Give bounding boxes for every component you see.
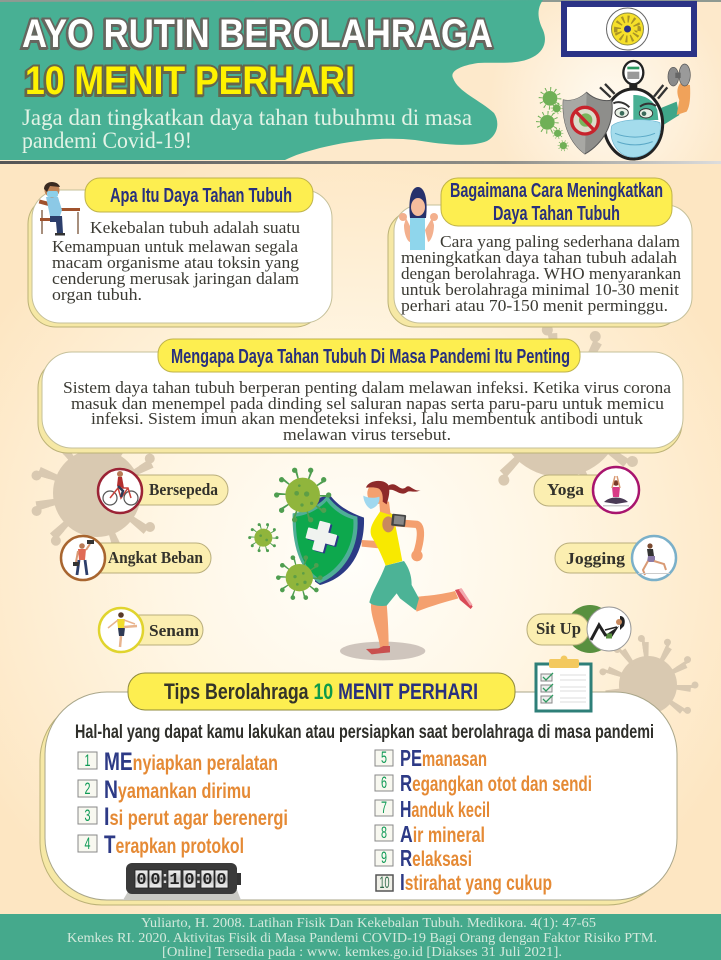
body text: meningkatkan daya tahan tubuh adalah: [401, 248, 678, 267]
icon: cyclist: [98, 469, 142, 513]
background virus: bottom right: [601, 638, 695, 732]
grey shield: [563, 92, 612, 154]
ground shadow: [340, 642, 425, 660]
footer references: Kemkes RI. 2020. Aktivitas Fisik di Masa Pandemi COVID-19 Bagi Orang dengan Faktor Risiko PTM.: [67, 931, 657, 946]
icon: digital timer: :: [193, 870, 204, 889]
list item 5: PEmanasan: [400, 745, 487, 771]
body text: Sistem daya tahan tubuh berperan penting dalam melawan infeksi. Ketika virus corona: [63, 378, 672, 397]
heading pill: [128, 673, 515, 710]
background virus: centre right: [474, 329, 646, 501]
icon: digital timer: 0: [136, 871, 147, 890]
list item 2: [78, 776, 251, 804]
icon: weight lifter: [61, 536, 105, 580]
list item 10: 10: [380, 873, 390, 892]
icon: clipboard: [536, 656, 591, 711]
heading text: Tips Berolahraga 10 MENIT PERHARI: [164, 679, 478, 704]
list item 9: [375, 845, 472, 871]
icon: digital timer: [123, 863, 241, 900]
list item 8: 8: [381, 823, 387, 842]
activity: angkat beban: [61, 536, 211, 580]
footer references: Yuliarto, H. 2008. Latihan Fisik Dan Kekebalan Tubuh. Medikora. 4(1): 47-65: [141, 916, 596, 931]
header divider bar: [0, 161, 721, 164]
icon: stretching woman: [99, 608, 143, 652]
runner: [362, 481, 473, 654]
body text: melawan virus tersebut.: [283, 425, 451, 444]
icon: yoga pose: [593, 467, 639, 513]
central illustration: runner with shield and viruses: [250, 469, 473, 660]
virus small: [250, 524, 277, 551]
activity: yoga: [534, 467, 639, 513]
icon: woman explaining: [399, 187, 438, 250]
body text: macam organisme atau toksin yang: [52, 253, 299, 272]
subtitle: [22, 105, 472, 153]
university logo box: [564, 4, 694, 54]
virus large: [277, 469, 329, 521]
heading pill: [441, 178, 672, 226]
list item 5: 5: [381, 748, 387, 767]
list item 6: Regangkan otot dan sendi: [400, 770, 592, 796]
list item 3: 3: [84, 806, 90, 825]
activity: bersepeda: Bersepeda: [149, 480, 218, 499]
footer references: [Online] Tersedia pada : www. kemkes.go.id [Diakses 31 Juli 2021].: [162, 945, 562, 960]
activity: senam: [99, 608, 203, 652]
shield: [293, 495, 364, 585]
activity: senam: Senam: [149, 621, 199, 640]
body text: Kemampuan untuk melawan segala: [52, 237, 299, 256]
stopwatch top: [623, 61, 643, 84]
panel: tips berolahraga: [40, 656, 677, 905]
icon: digital timer: :: [160, 870, 170, 889]
heading text: Mengapa Daya Tahan Tubuh Di Masa Pandemi Itu Penting: [171, 346, 570, 368]
panel: mengapa daya tahan tubuh penting: [38, 339, 683, 453]
icon: jogger: [632, 536, 676, 580]
subtitle: pandemi Covid-19!: [22, 128, 192, 153]
heading pill: [85, 178, 313, 212]
panel: apa itu daya tahan tubuh: [28, 178, 332, 327]
heading pill: [158, 339, 580, 372]
title line 2: 10 MENIT PERHARI: [25, 59, 355, 103]
list item 9: Relaksasi: [400, 845, 472, 871]
body text: [401, 232, 681, 315]
virus lower: [278, 557, 320, 599]
body text: masuk dan menempel pada dinding sel saluran napas serta paru-paru untuk memicu: [71, 394, 664, 413]
activity: jogging: Jogging: [566, 549, 626, 568]
body text: infeksi. Sistem imun akan mendeteksi infeksi, lalu membentuk antibodi untuk: [91, 409, 644, 428]
body text: cenderung merusak jaringan dalam: [52, 269, 299, 288]
title line 1: AYO RUTIN BEROLAHRAGA: [22, 12, 493, 56]
activity: sit up: Sit Up: [536, 619, 581, 638]
list item 10: Istirahat yang cukup: [400, 869, 552, 895]
list item 9: 9: [381, 848, 387, 867]
list item 4: 4: [84, 834, 90, 853]
header illustration: shield, clock face, dumbbell: [538, 61, 690, 159]
list item 5: [375, 745, 487, 771]
list item 1: 1: [84, 751, 90, 770]
list item 7: [375, 796, 490, 822]
list item 8: Air mineral: [400, 821, 485, 847]
list item 1: MEnyiapkan peralatan: [104, 748, 278, 776]
heading text: Daya Tahan Tubuh: [493, 203, 620, 225]
list item 2: 2: [84, 779, 90, 798]
activity: yoga: Yoga: [547, 480, 585, 499]
face mask: [611, 120, 660, 157]
icon: digital timer: 1: [169, 871, 180, 890]
footer references: [0, 914, 721, 960]
body text: perhari atau 70-150 menit perminggu.: [401, 296, 668, 315]
green viruses: [538, 89, 568, 150]
body text: [63, 378, 672, 444]
icon: student at desk: [39, 182, 80, 236]
activity: angkat beban: Angkat Beban: [108, 548, 203, 567]
body text: Kekebalan tubuh adalah suatu: [90, 218, 300, 237]
activity: jogging: [555, 536, 676, 580]
subtitle: Jaga dan tingkatkan daya tahan tubuhmu di masa: [22, 105, 472, 130]
heading text: Apa Itu Daya Tahan Tubuh: [110, 185, 292, 207]
icon: sit up pose: [587, 607, 631, 651]
background virus: left: [34, 430, 160, 556]
list item 4: [78, 831, 244, 859]
body text: [52, 218, 300, 304]
heading text: [450, 180, 663, 225]
icon: digital timer: 0: [150, 871, 161, 890]
panel: bagaimana cara meningkatkan: [388, 178, 692, 327]
list item 2: Nyamankan dirimu: [104, 776, 251, 804]
activity: sit up: [527, 605, 631, 653]
list item 7: 7: [381, 798, 387, 817]
body text: organ tubuh.: [52, 285, 142, 304]
icon: digital timer: 0: [184, 871, 195, 890]
body text: dengan berolahraga. WHO menyarankan: [401, 264, 681, 283]
list item 4: Terapkan protokol: [104, 831, 244, 859]
list item 6: [375, 770, 592, 796]
list item 6: 6: [381, 773, 387, 792]
list item 8: [375, 821, 485, 847]
arm and dumbbell: [660, 102, 679, 125]
header green wave: [0, 0, 545, 160]
body text: untuk berolahraga minimal 10-30 menit: [401, 280, 679, 299]
list item 7: Handuk kecil: [400, 796, 490, 822]
activity: bersepeda: [98, 469, 228, 513]
body text: Cara yang paling sederhana dalam: [440, 232, 680, 251]
list item 3: Isi perut agar berenergi: [104, 803, 288, 831]
list item 10: [376, 869, 552, 895]
header: [0, 0, 721, 164]
icon: digital timer: 0: [202, 871, 213, 890]
icon: digital timer: 0: [216, 871, 227, 890]
clock face: [604, 89, 663, 159]
